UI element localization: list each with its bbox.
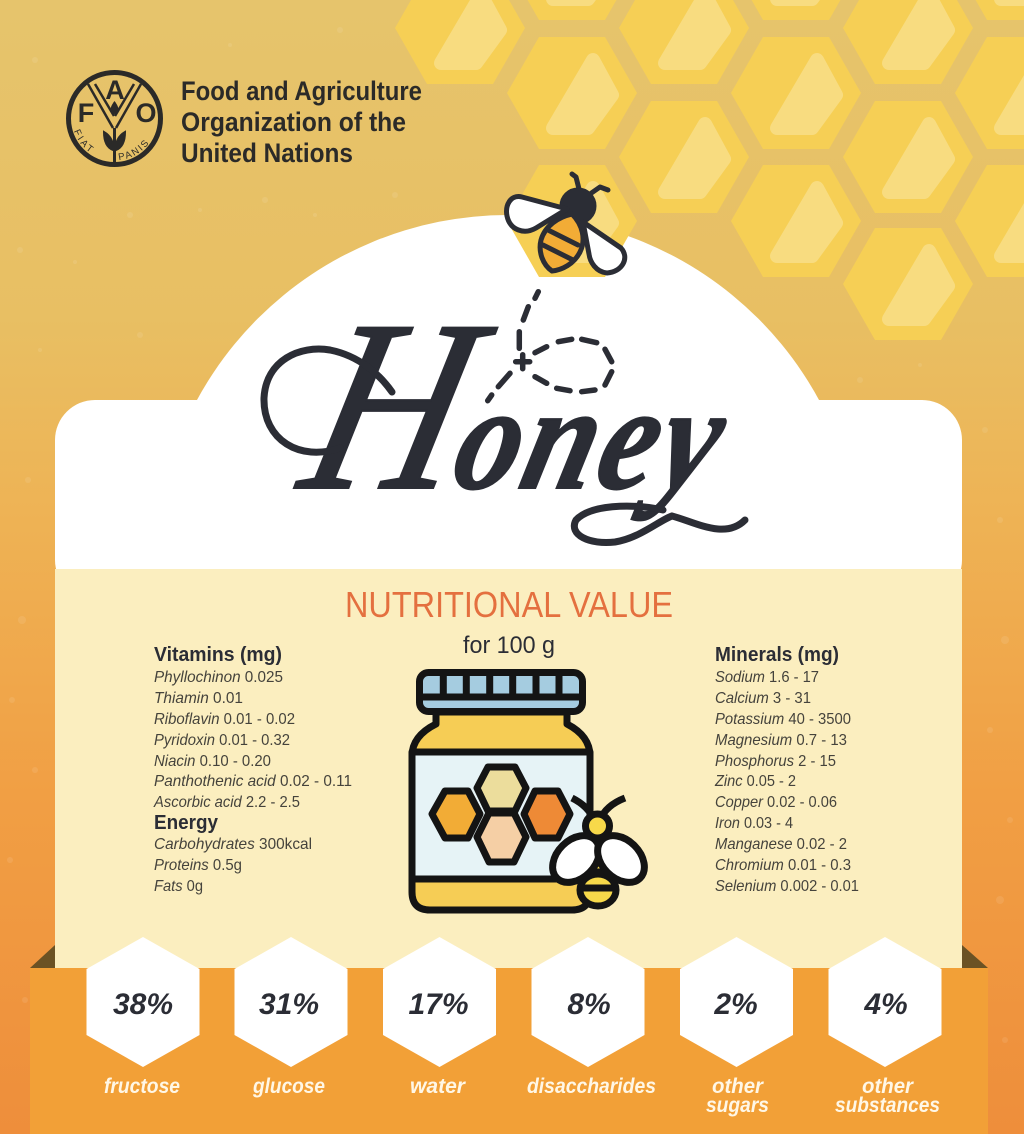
dashed flight path: [488, 292, 612, 401]
vitamins and energy list: Niacin 0.10 - 0.20: [154, 753, 271, 770]
FAO name: Food and Agriculture: [181, 76, 422, 106]
icon: honey jar: [412, 672, 590, 910]
FAO logo: [66, 70, 163, 167]
FAO logo: PANIS: [118, 140, 148, 160]
honeycomb pattern: [395, 0, 1024, 340]
icon: jar bee: [543, 798, 654, 906]
vitamins and energy list: Proteins 0.5g: [154, 857, 242, 874]
vitamins and energy list: Carbohydrates 300kcal: [154, 836, 312, 853]
minerals list: [714, 644, 859, 895]
stat: glucose: [234, 937, 348, 1098]
heading: nutritional value: NUTRITIONAL VALUE: [345, 584, 673, 625]
stat: other substances: substances: [835, 1094, 940, 1117]
stat: water: water: [410, 1075, 467, 1098]
stat: water: [383, 937, 496, 1098]
stat: other sugars: 2%: [713, 988, 758, 1021]
white arch panel: [55, 215, 962, 923]
fold corner left: [30, 945, 55, 968]
minerals list: Sodium 1.6 - 17: [715, 669, 819, 686]
vitamins and energy list: Pyridoxin 0.01 - 0.32: [154, 732, 290, 749]
vitamins and energy list: Ascorbic acid 2.2 - 2.5: [153, 794, 300, 811]
bee hexagon: [507, 165, 637, 277]
minerals list: Phosphorus 2 - 15: [715, 753, 836, 770]
minerals list: Magnesium 0.7 - 13: [715, 732, 847, 749]
stat: other sugars: sugars: [706, 1094, 769, 1117]
vitamins and energy list: Phyllochinon 0.025: [154, 669, 283, 686]
FAO logo: FIAT: [74, 129, 94, 152]
vitamins and energy list: Thiamin 0.01: [154, 690, 243, 707]
subheading: for 100 g: [463, 632, 555, 659]
stat: glucose: 31%: [259, 988, 319, 1021]
FAO logo: A: [105, 75, 125, 105]
vitamins and energy list: Panthothenic acid 0.02 - 0.11: [154, 773, 352, 790]
stat: other substances: other: [862, 1075, 915, 1098]
title flourishes: [264, 349, 745, 543]
nutrition panel: [55, 569, 962, 969]
FAO name: [181, 76, 422, 168]
minerals list: Iron 0.03 - 4: [715, 815, 793, 832]
fold corner right: [962, 945, 988, 968]
stat: fructose: fructose: [104, 1075, 180, 1098]
FAO logo: O: [135, 98, 157, 128]
minerals list: Calcium 3 - 31: [715, 690, 811, 707]
minerals list: Zinc 0.05 - 2: [714, 773, 796, 790]
minerals list: Copper 0.02 - 0.06: [715, 794, 837, 811]
vitamins and energy list: [153, 644, 352, 895]
stat: other sugars: [680, 937, 793, 1117]
minerals list: Selenium 0.002 - 0.01: [715, 878, 859, 895]
vitamins and energy list: Energy: [154, 812, 219, 834]
vitamins and energy list: Fats 0g: [154, 878, 203, 895]
stat: glucose: glucose: [252, 1075, 325, 1098]
minerals list: Manganese 0.02 - 2: [715, 836, 847, 853]
vitamins and energy list: Vitamins (mg): [154, 644, 282, 666]
stat: disaccharides: 8%: [567, 988, 611, 1021]
stat: water: 17%: [408, 988, 469, 1021]
stat: disaccharides: disaccharides: [527, 1075, 656, 1098]
stat: fructose: [86, 937, 200, 1098]
FAO name: Organization of the: [181, 107, 406, 137]
composition band: [30, 968, 988, 1134]
stat: fructose: 38%: [113, 988, 173, 1021]
minerals list: Chromium 0.01 - 0.3: [715, 857, 851, 874]
FAO name: United Nations: [181, 138, 353, 168]
icon: flying bee: [507, 174, 625, 273]
stat: other substances: [828, 937, 942, 1117]
title: Honey: Honey: [280, 271, 767, 542]
stat: other substances: 4%: [863, 988, 908, 1021]
FAO logo: F: [78, 98, 94, 128]
stat: other sugars: other: [712, 1075, 765, 1098]
stat: disaccharides: [527, 937, 656, 1098]
minerals list: Potassium 40 - 3500: [715, 711, 851, 728]
vitamins and energy list: Riboflavin 0.01 - 0.02: [154, 711, 295, 728]
minerals list: Minerals (mg): [715, 644, 839, 666]
